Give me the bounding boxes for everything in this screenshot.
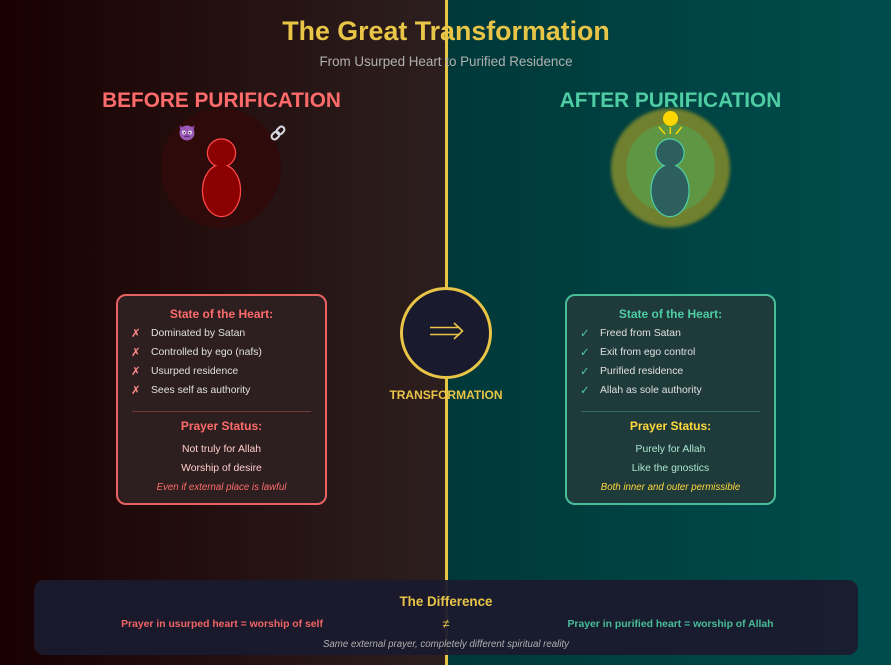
list: before items: Sees self as authority <box>151 385 250 396</box>
panel: after state <box>565 294 776 505</box>
list: after items: Freed from Satan <box>600 328 681 339</box>
list: before items: ✗ <box>131 385 141 397</box>
central divider line <box>444 0 448 665</box>
figure: heart before purification <box>161 108 281 228</box>
panel heading: state of the heart: State of the Heart: <box>170 307 273 321</box>
equation: usurped heart: Prayer in usurped heart = worship of self <box>121 619 323 630</box>
list: after items: Purified residence <box>600 366 683 377</box>
panel heading: prayer status: Prayer Status: <box>630 419 711 433</box>
figure: heart after purification <box>609 106 732 230</box>
heading: after purification: AFTER PURIFICATION <box>560 89 781 112</box>
list: before items: Controlled by ego (nafs) <box>151 347 262 358</box>
icon: transformation arrow circle <box>400 287 492 379</box>
list: before items <box>131 328 262 397</box>
list: after items: ✓ <box>580 328 590 340</box>
panel: before state <box>116 294 327 505</box>
list: after items: ✓ <box>580 347 590 359</box>
subtitle: From Usurped Heart to Purified Residence <box>319 54 573 69</box>
list: after items: ✓ <box>580 385 590 397</box>
icon: chain <box>270 126 286 140</box>
list: before items: Dominated by Satan <box>151 328 245 339</box>
list: after items: Allah as sole authority <box>600 385 702 396</box>
list: before items: Usurped residence <box>151 366 238 377</box>
background: before side <box>0 0 446 665</box>
list: after items <box>580 328 702 397</box>
panel heading: prayer status: Prayer Status: <box>181 419 262 433</box>
note: same external prayer: Same external prayer, completely different spiritual reality <box>323 639 569 650</box>
equation: purified heart: Prayer in purified heart = worship of Allah <box>567 619 774 630</box>
note: after: Both inner and outer permissible <box>601 482 740 493</box>
text: like the gnostics: Like the gnostics <box>632 463 709 474</box>
text: not truly for Allah: Not truly for Allah <box>182 444 261 455</box>
background: after side <box>446 0 891 665</box>
arrow <box>430 322 464 340</box>
text: worship of desire: Worship of desire <box>181 463 262 474</box>
heading: before purification: BEFORE PURIFICATION <box>102 89 341 112</box>
list: before items: ✗ <box>131 347 141 359</box>
text: purely for Allah: Purely for Allah <box>636 444 705 455</box>
icon: devil <box>180 126 194 140</box>
list: before items: ✗ <box>131 366 141 378</box>
panel heading: state of the heart: State of the Heart: <box>619 307 722 321</box>
panel: the difference <box>34 580 858 655</box>
list: after items: ✓ <box>580 366 590 378</box>
label: transformation: TRANSFORMATION <box>389 388 503 402</box>
title: The Great Transformation <box>282 16 610 46</box>
symbol: not equal: ≠ <box>442 616 450 631</box>
list: before items: ✗ <box>131 328 141 340</box>
heading: the difference: The Difference <box>399 594 492 609</box>
list: after items: Exit from ego control <box>600 347 695 358</box>
note: before: Even if external place is lawful <box>157 482 286 493</box>
